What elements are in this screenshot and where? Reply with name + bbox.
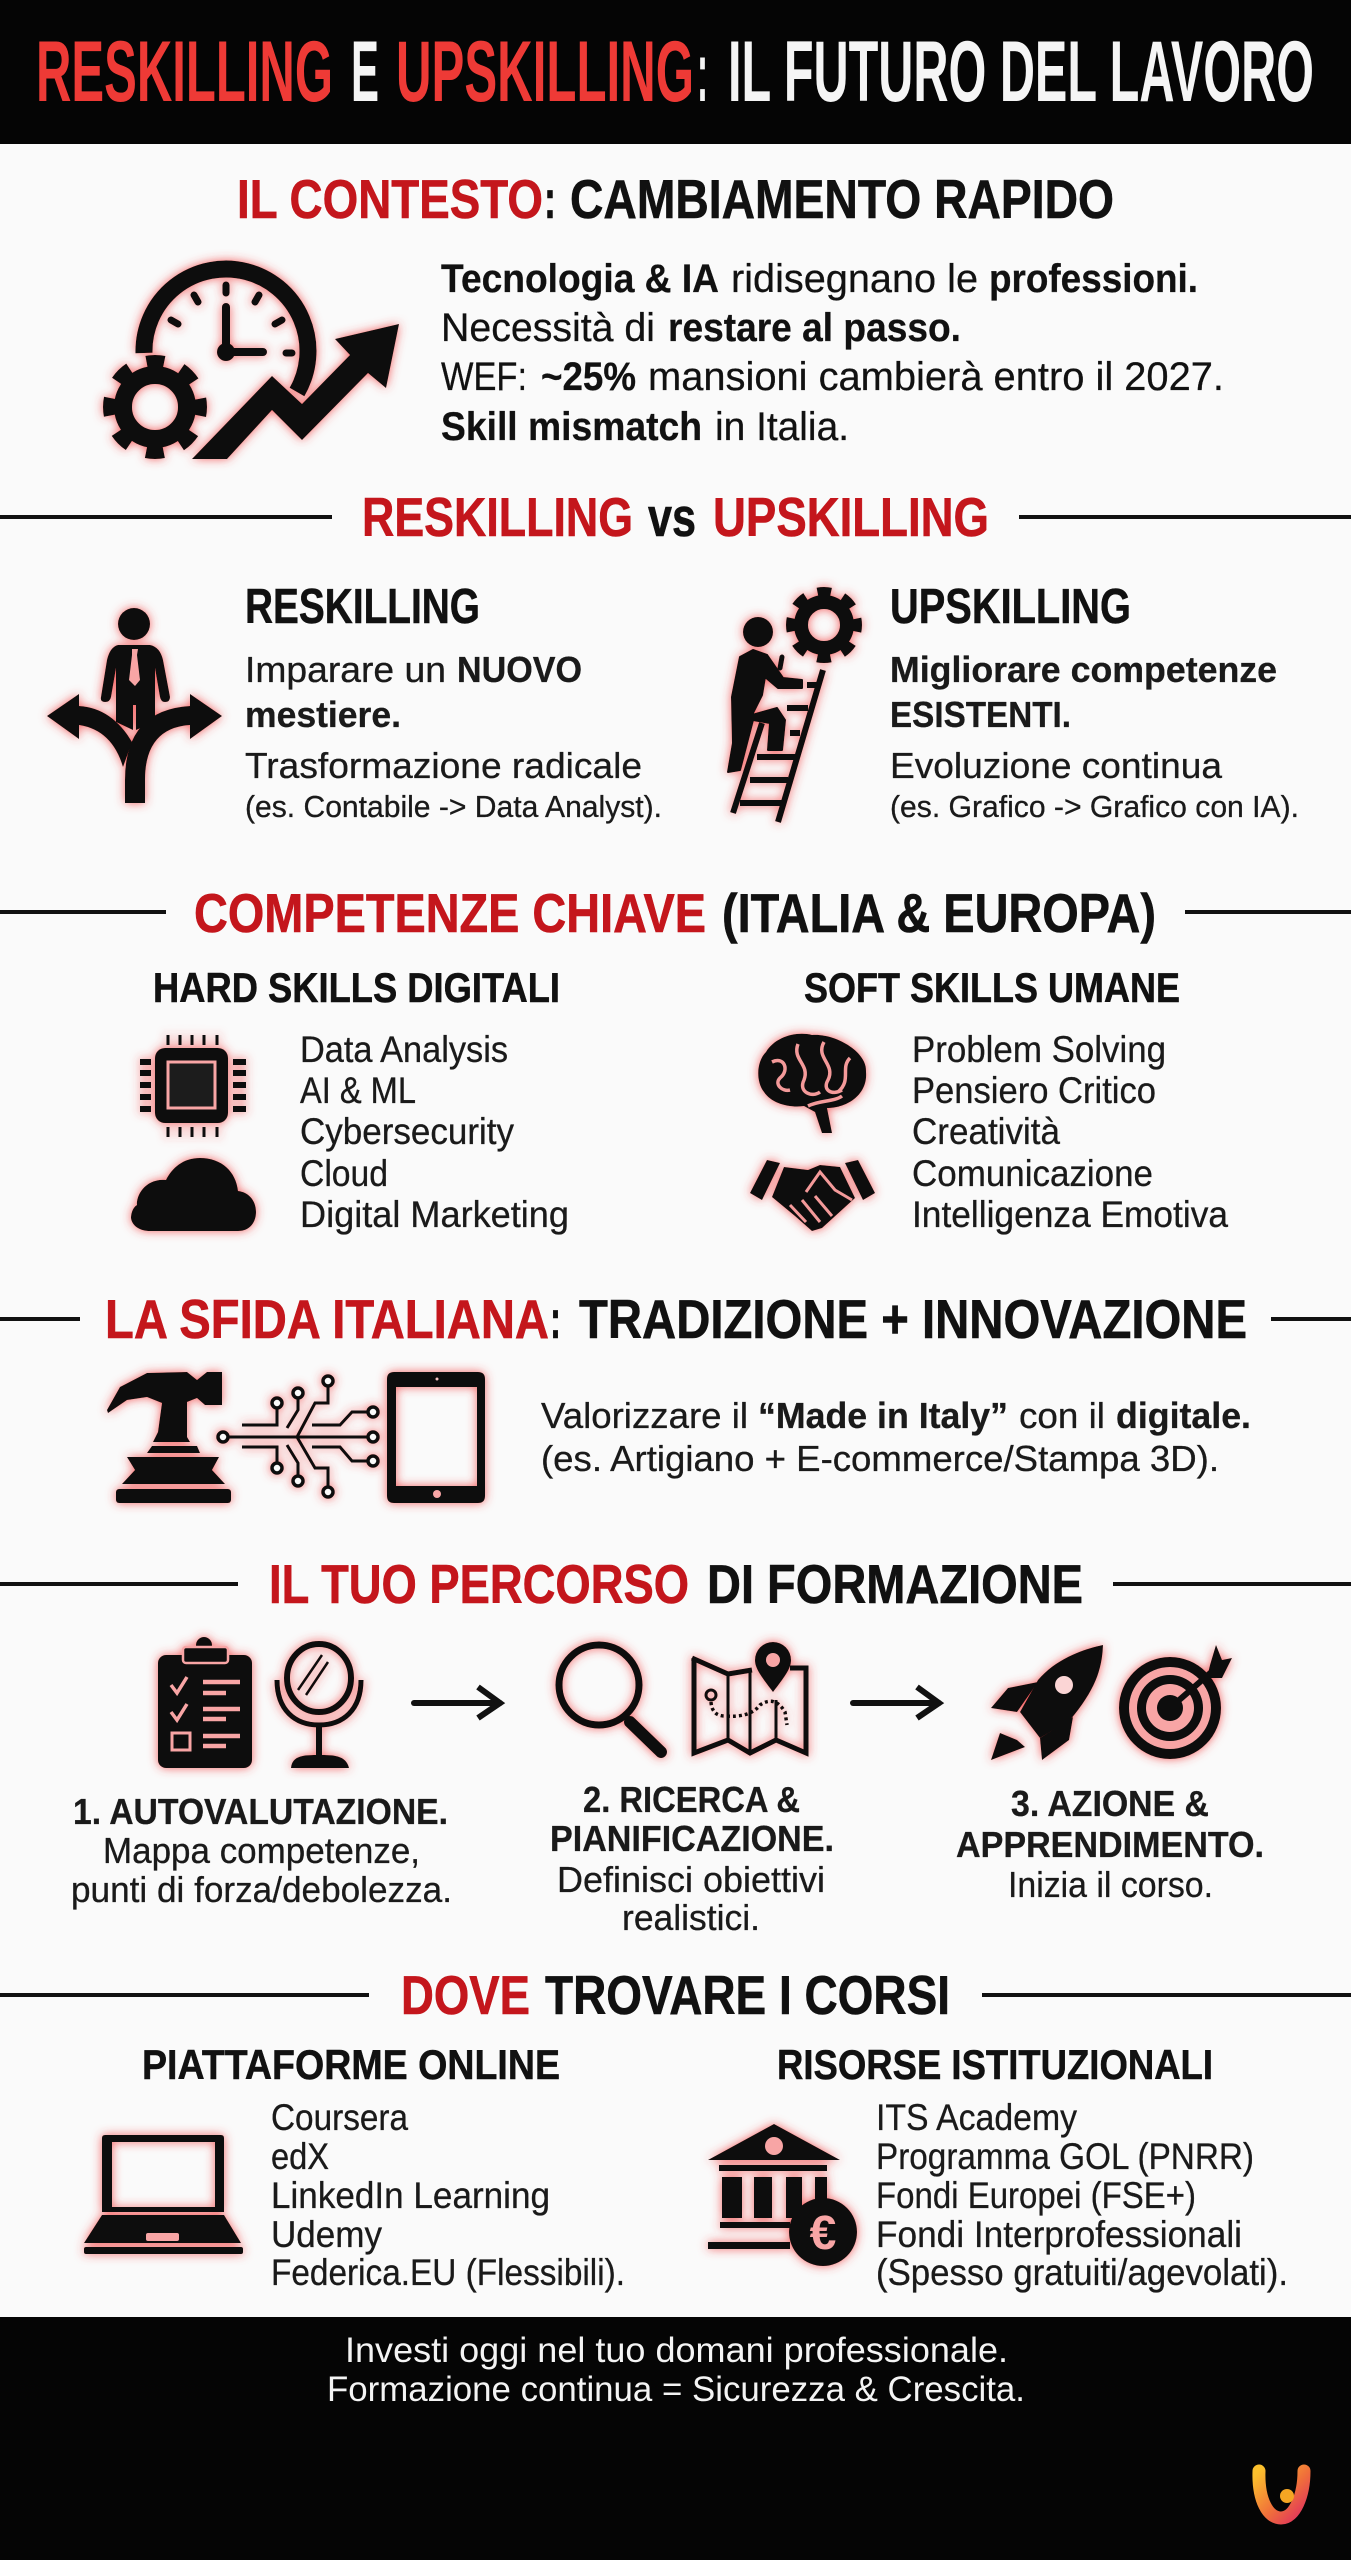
step 1 text: Mappa competenze, (103, 1830, 420, 1871)
arrow: step 2 to step 3 (853, 1687, 939, 1718)
panel: il tuo percorso (0, 1553, 1351, 1938)
subheading: piattaforme online: PIATTAFORME ONLINE (142, 2041, 560, 2088)
icon: rocket (991, 1645, 1103, 1760)
heading: la sfida italiana (105, 1288, 1247, 1350)
icon: laptop (84, 2135, 243, 2254)
text block: context: professioni. (989, 257, 1198, 301)
step 3 text: APPRENDIMENTO. (956, 1824, 1264, 1865)
title: : (697, 24, 708, 120)
list: online platforms: Coursera (271, 2097, 408, 2138)
subheading: hard skills: HARD SKILLS DIGITALI (153, 964, 560, 1011)
list: hard skills: Cybersecurity (300, 1111, 514, 1152)
heading: competenze chiave: (ITALIA & EUROPA) (722, 882, 1156, 944)
text block: made in italy: con il (1019, 1395, 1105, 1436)
text block: made in italy: Valorizzare il (541, 1395, 748, 1436)
step 2 text: 2. RICERCA & (583, 1779, 800, 1820)
list: institutional resources: ITS Academy (876, 2097, 1077, 2138)
list: online platforms: Federica.EU (Flessibili). (271, 2252, 625, 2293)
icon: clipboard checklist (158, 1637, 252, 1768)
text block: upskilling (890, 580, 1299, 824)
text block: upskilling: Migliorare competenze (890, 649, 1277, 690)
icon: person climbing ladder to a gear (728, 593, 856, 822)
text block: upskilling: ESISTENTI. (890, 694, 1071, 735)
icon: target with arrow (1119, 1645, 1232, 1759)
heading: competenze chiave: COMPETENZE CHIAVE (194, 882, 706, 944)
heading: reskilling vs upskilling (362, 486, 989, 548)
heading: il contesto: CAMBIAMENTO RAPIDO (570, 168, 1114, 230)
step 3 text: 3. AZIONE & (1011, 1783, 1209, 1824)
text block: reskilling: Imparare un (245, 649, 446, 690)
icon: hammer on an anvil (107, 1372, 231, 1503)
heading: reskilling vs upskilling: vs (648, 486, 696, 548)
icon: institution with euro coin (708, 2124, 857, 2266)
step 3 text: Inizia il corso. (1008, 1864, 1213, 1905)
list: soft skills: Intelligenza Emotiva (912, 1194, 1228, 1235)
list: institutional resources: (Spesso gratuiti/agevolati). (876, 2252, 1288, 2293)
step 2 text: Definisci obiettivi (557, 1859, 825, 1900)
list: hard skills: AI & ML (300, 1070, 416, 1111)
step 2 text: realistici. (622, 1897, 760, 1938)
list: soft skills: Problem Solving (912, 1029, 1166, 1070)
list: online platforms: edX (271, 2136, 329, 2177)
panel: reskilling vs upskilling (0, 486, 1351, 824)
heading: il contesto (237, 168, 1114, 230)
text block: context: Necessità di (441, 306, 655, 350)
list: institutional resources (876, 2097, 1288, 2293)
text block: upskilling: (es. Grafico -> Grafico con IA). (890, 789, 1299, 824)
heading: il tuo percorso: IL TUO PERCORSO (269, 1553, 689, 1615)
text block: upskilling: Evoluzione continua (890, 745, 1223, 786)
text block: context: Skill mismatch (441, 405, 702, 449)
icon: mirror (277, 1644, 361, 1768)
icon: clock, gear and rising arrow (111, 269, 399, 459)
text block: reskilling: NUOVO (457, 649, 582, 690)
text block: reskilling: (es. Contabile -> Data Analyst). (245, 789, 662, 824)
heading: la sfida italiana: TRADIZIONE + INNOVAZIONE (579, 1288, 1247, 1350)
text block: context: in Italia. (715, 405, 849, 449)
text block: reskilling: mestiere. (245, 694, 401, 735)
text block: made in italy: “Made in Italy” (758, 1395, 1008, 1436)
heading: dove trovare i corsi: TROVARE I CORSI (545, 1964, 950, 2026)
icon: brain (758, 1034, 866, 1133)
list: hard skills: Digital Marketing (300, 1194, 569, 1235)
text block: context: mansioni cambierà entro il 2027. (648, 355, 1224, 399)
panel: la sfida italiana (0, 1288, 1351, 1503)
icon: folded map with pin (692, 1642, 806, 1753)
header band (0, 0, 1351, 144)
step 1 text: 1. AUTOVALUTAZIONE. (73, 1791, 448, 1832)
panel: dove trovare i corsi (0, 1964, 1351, 2293)
icon: institution with euro coin: € (810, 2207, 836, 2260)
step 2 text: PIANIFICAZIONE. (550, 1818, 834, 1859)
text block: made in italy: digitale. (1116, 1395, 1251, 1436)
step 1 text: punti di forza/debolezza. (71, 1869, 452, 1910)
footer message: Formazione continua = Sicurezza & Crescita. (327, 2370, 1025, 2409)
text block: reskilling: RESKILLING (245, 580, 480, 634)
text block: context: ridisegnano le (731, 257, 978, 301)
list: soft skills (912, 1029, 1228, 1235)
title: RESKILLING (36, 24, 333, 120)
icon: digital circuit (218, 1376, 378, 1497)
panel: il contesto (111, 168, 1224, 459)
text block: upskilling: UPSKILLING (890, 580, 1131, 634)
icon: magnifying glass (559, 1645, 661, 1752)
text block: context: WEF: (441, 355, 527, 399)
text block: reskilling: Trasformazione radicale (245, 745, 642, 786)
heading: dove trovare i corsi: DOVE (401, 1964, 530, 2026)
text block: context (441, 257, 1224, 449)
text block: context: restare al passo. (668, 306, 961, 350)
heading: reskilling vs upskilling: UPSKILLING (713, 486, 989, 548)
list: soft skills: Creatività (912, 1111, 1060, 1152)
title: UPSKILLING (396, 24, 694, 120)
subheading: risorse istituzionali: RISORSE ISTITUZIONALI (777, 2041, 1213, 2088)
list: soft skills: Pensiero Critico (912, 1070, 1156, 1111)
footer band (0, 2317, 1351, 2560)
list: hard skills: Data Analysis (300, 1029, 508, 1070)
step 1 text (71, 1791, 452, 1910)
text block: context: ~25% (541, 355, 636, 399)
panel: competenze chiave (0, 882, 1351, 1235)
heading: il tuo percorso: DI FORMAZIONE (707, 1553, 1083, 1615)
footer message: Investi oggi nel tuo domani professionale. (345, 2331, 1008, 2370)
heading: il contesto: : (544, 168, 556, 230)
list: soft skills: Comunicazione (912, 1153, 1153, 1194)
icon: cloud (131, 1158, 256, 1231)
list: institutional resources: Fondi Interprofessionali (876, 2214, 1242, 2255)
icon: logo (1259, 2471, 1304, 2518)
heading: dove trovare i corsi (401, 1964, 950, 2026)
list: hard skills: Cloud (300, 1153, 388, 1194)
heading: reskilling vs upskilling: RESKILLING (362, 486, 633, 548)
title: E (351, 24, 379, 120)
heading: il contesto: IL CONTESTO (237, 168, 543, 230)
list: institutional resources: Fondi Europei (FSE+) (876, 2175, 1196, 2216)
text block: made in italy (541, 1395, 1251, 1479)
subheading: soft skills: SOFT SKILLS UMANE (804, 964, 1180, 1011)
icon: tablet (387, 1372, 485, 1503)
heading: competenze chiave (194, 882, 1156, 944)
step 3 text (956, 1783, 1264, 1905)
footer message (327, 2331, 1025, 2409)
text block: reskilling (245, 580, 662, 824)
list: institutional resources: Programma GOL (PNRR) (876, 2136, 1254, 2177)
step 2 text (550, 1779, 834, 1938)
title (36, 24, 1314, 120)
text block: made in italy: (es. Artigiano + E-commerce/Stampa 3D). (541, 1438, 1219, 1479)
list: online platforms: LinkedIn Learning (271, 2175, 550, 2216)
icon: person at a crossroads (47, 608, 222, 803)
heading: la sfida italiana: : (550, 1288, 561, 1350)
text block: context: Tecnologia & IA (441, 257, 719, 301)
list: online platforms (271, 2097, 625, 2293)
heading: la sfida italiana: LA SFIDA ITALIANA (105, 1288, 549, 1350)
list: hard skills (300, 1029, 569, 1235)
list: online platforms: Udemy (271, 2214, 382, 2255)
icon: handshake (750, 1160, 875, 1231)
arrow: step 1 to step 2 (414, 1687, 500, 1718)
icon: microchip (140, 1035, 246, 1137)
heading: il tuo percorso (269, 1553, 1083, 1615)
